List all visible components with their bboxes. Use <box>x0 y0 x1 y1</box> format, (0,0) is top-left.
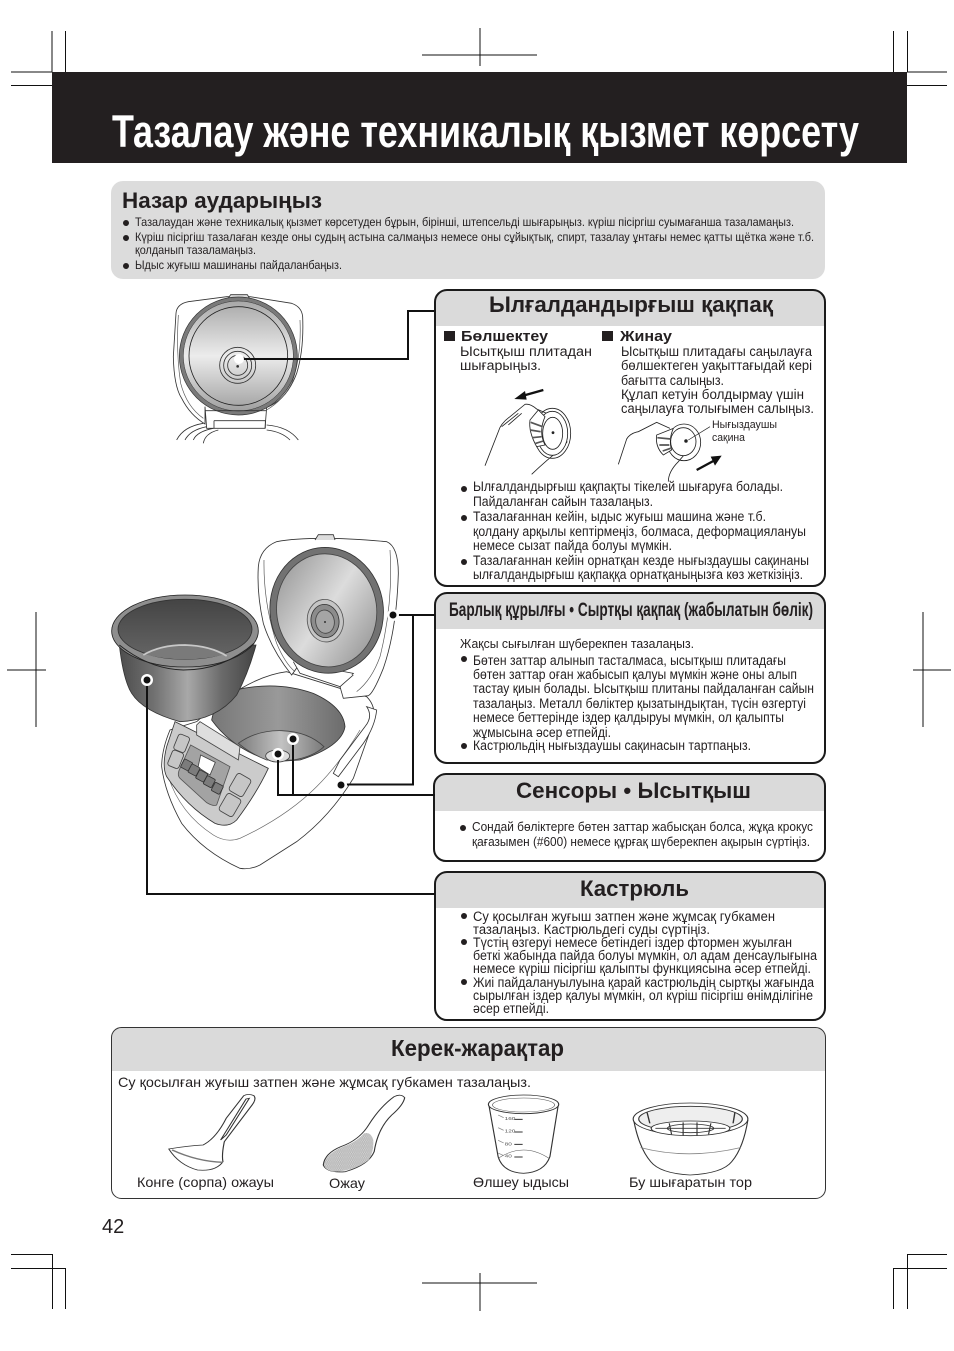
whole unit notes: тастау қиын болады. Ысытқыш плитаны пайдаланған сайын <box>473 681 814 696</box>
whole unit notes <box>460 636 814 753</box>
assembly instructions: бағытта салыңыз. <box>621 373 724 388</box>
heading: inner pan: Кастрюль <box>580 876 689 901</box>
removal instructions: Ысытқыш плитадан <box>460 344 592 359</box>
inner pan notes: әсер етпейді. <box>473 1001 549 1016</box>
care notes: Тазалағаннан кейін, ыдыс жуғыш машина және т.б. <box>473 509 766 524</box>
cooking cavity <box>212 686 345 762</box>
removed inner pan <box>112 595 258 722</box>
illustration: inserting cap by hand <box>618 422 722 482</box>
notice text: Ыдыс жуғыш машинаны пайдаланбаңыз. <box>135 258 342 272</box>
whole unit notes: Кастрюльдің нығыздаушы сақинасын тартпаңыз. <box>473 738 751 753</box>
care notes: Тазалағаннан кейін орнатқан кезде нығыздаушы сақинаны <box>473 553 809 568</box>
page number: 42 <box>102 1216 124 1238</box>
caption: soup ladle: Конге (сорпа) ожауы <box>137 1174 274 1190</box>
notice text: қолданып тазаламаңыз. <box>135 243 256 257</box>
icon: rice paddle <box>323 1095 405 1172</box>
label: sealing ring: сақина <box>712 432 746 444</box>
heading: accessories: Керек-жарақтар <box>391 1035 564 1061</box>
open lid <box>258 538 398 698</box>
whole unit notes: Жақсы сығылған шүберекпен тазалаңыз. <box>460 636 694 651</box>
care notes: Пайдаланған сайын тазалаңыз. <box>473 494 653 509</box>
sensors notes: қағазымен (#600) немесе құрғақ шүберекпен ақырын сүртіңіз. <box>472 834 810 849</box>
connectors: cooker parts to panels <box>141 609 435 894</box>
notice text <box>123 215 814 272</box>
assembly instructions: Құлап кетуін болдырмау үшін <box>621 387 804 402</box>
whole unit notes: тазалаңыз. Металл бөліктер қызатындықтан, түсін өзгертуі <box>473 696 806 711</box>
icon: measuring cup: 120 <box>505 1129 515 1134</box>
illustration: open rice cooker <box>112 535 398 869</box>
assembly instructions: саңылауға толығымен салыңыз. <box>621 401 814 416</box>
care notes <box>461 479 809 582</box>
accessories instruction: Су қосылған жуғыш затпен және жұмсақ губкамен тазалаңыз. <box>118 1074 531 1090</box>
notice text: Тазалаудан және техникалық қызмет көрсетуден бұрын, бірінші, штепсельді шығарыңыз. күріш пісіргіш суымағанша тазаламаңыз. <box>135 215 794 229</box>
inner pan notes: Түстің өзгеруі немесе бетіндегі іздер фтормен жуылған <box>473 935 792 950</box>
icon: measuring cup: 160 <box>505 1117 515 1122</box>
illustration: removing cap by hand <box>485 390 571 474</box>
icon: measuring cup: 40 <box>505 1154 512 1159</box>
inner pan notes: Жиі пайдалануылуына қарай кастрюльдің сыртқы жағында <box>473 975 814 990</box>
inner pan notes: сырылған іздер қалуы мүмкін, ол күріш пісіргіш өнімділігіне <box>473 988 813 1003</box>
removal instructions: Бөлшектеу <box>461 328 549 345</box>
caption: steam basket: Бу шығаратын тор <box>629 1174 752 1190</box>
inner pan notes: немесе күріш пісіргіш қалыпты функциясына әсер етпейді. <box>473 961 811 976</box>
assembly instructions <box>602 328 814 416</box>
connector: lid to condensation cap panel <box>234 311 435 364</box>
heading: condensation cap: Ылғалдандырғыш қақпақ <box>489 292 774 317</box>
care notes: немесе сызат пайда болуы мүмкін. <box>473 538 672 553</box>
panel: inner pan <box>435 872 825 1020</box>
label: sealing ring: Нығыздаушы <box>712 419 777 431</box>
caption: measuring cup: Өлшеу ыдысы <box>473 1174 569 1190</box>
panel: whole unit and outer lid <box>435 593 825 763</box>
icon: soup ladle <box>169 1094 255 1170</box>
whole unit notes: бөтен заттар оған жабысып қалуы мүмкін және оны алып <box>473 667 797 682</box>
panel: attention notice <box>111 181 825 279</box>
title banner <box>52 72 907 163</box>
care notes: ылғалдандырғыш қақпаққа орнатқаныңызға көз жеткізіңіз. <box>473 567 803 582</box>
assembly instructions: бөлшектеген уақыттағыдай кері <box>621 358 812 373</box>
assembly instructions: Ысытқыш плитадағы саңылауға <box>621 344 812 359</box>
sensors notes: Сондай бөліктерге бөтен заттар жабысқан болса, жұқа крокус <box>472 819 813 834</box>
whole unit notes: Бөтен заттар алынып тасталмаса, ысытқыш плитадағы <box>473 653 786 668</box>
icon: measuring cup: 80 <box>505 1142 512 1147</box>
panel: sensors and heater <box>434 774 825 861</box>
whole unit notes: немесе беттерінде іздер қалдыруы мүмкін, ол қалыпты <box>473 710 784 725</box>
inner pan notes: Су қосылған жуғыш затпен және жұмсақ губкамен <box>473 909 775 924</box>
removal instructions: шығарыңыз. <box>460 358 541 373</box>
label: sealing ring <box>712 419 777 444</box>
sensors notes <box>460 819 813 849</box>
whole unit notes: жұмысына әсер етпейді. <box>473 725 611 740</box>
notice text: Күріш пісіргіш тазалаған кезде оны судың астына салмаңыз немесе оны сұйықтық, спирт, тазалау ұнтағы немес қатты щётка және т.б. <box>135 230 814 244</box>
care notes: қолдану арқылы кептірмеңіз, болмаса, деформациялануы <box>473 524 806 539</box>
caption: rice paddle: Ожау <box>329 1175 365 1191</box>
illustration: lid top view <box>173 295 303 443</box>
panel: accessories <box>112 1028 826 1198</box>
heading: sensors and heater: Сенсоры • Ысытқыш <box>516 778 751 803</box>
icon: measuring cup <box>488 1095 559 1173</box>
assembly instructions: Жинау <box>619 328 673 345</box>
panel: condensation cap <box>435 290 825 586</box>
inner pan notes: тазалаңыз. Кастрюльдегі суды сүртіңіз. <box>473 922 710 937</box>
care notes: Ылғалдандырғыш қақпақты тікелей шығаруға болады. <box>473 479 783 494</box>
inner pan notes <box>461 909 817 1016</box>
removal instructions <box>444 328 592 373</box>
heading: attention: Назар аударыңыз <box>122 188 322 213</box>
icon: steam basket <box>633 1103 748 1175</box>
temperature sensor <box>266 750 290 762</box>
inner pan notes: беткі жабында пайда болуы мүмкін, ол адам денсаулығына <box>473 948 817 963</box>
heading: whole unit: Барлық құрылғы • Сыртқы қақпақ (жабылатын бөлік) <box>449 600 813 621</box>
cooker body <box>162 672 374 869</box>
control panel <box>164 722 268 825</box>
